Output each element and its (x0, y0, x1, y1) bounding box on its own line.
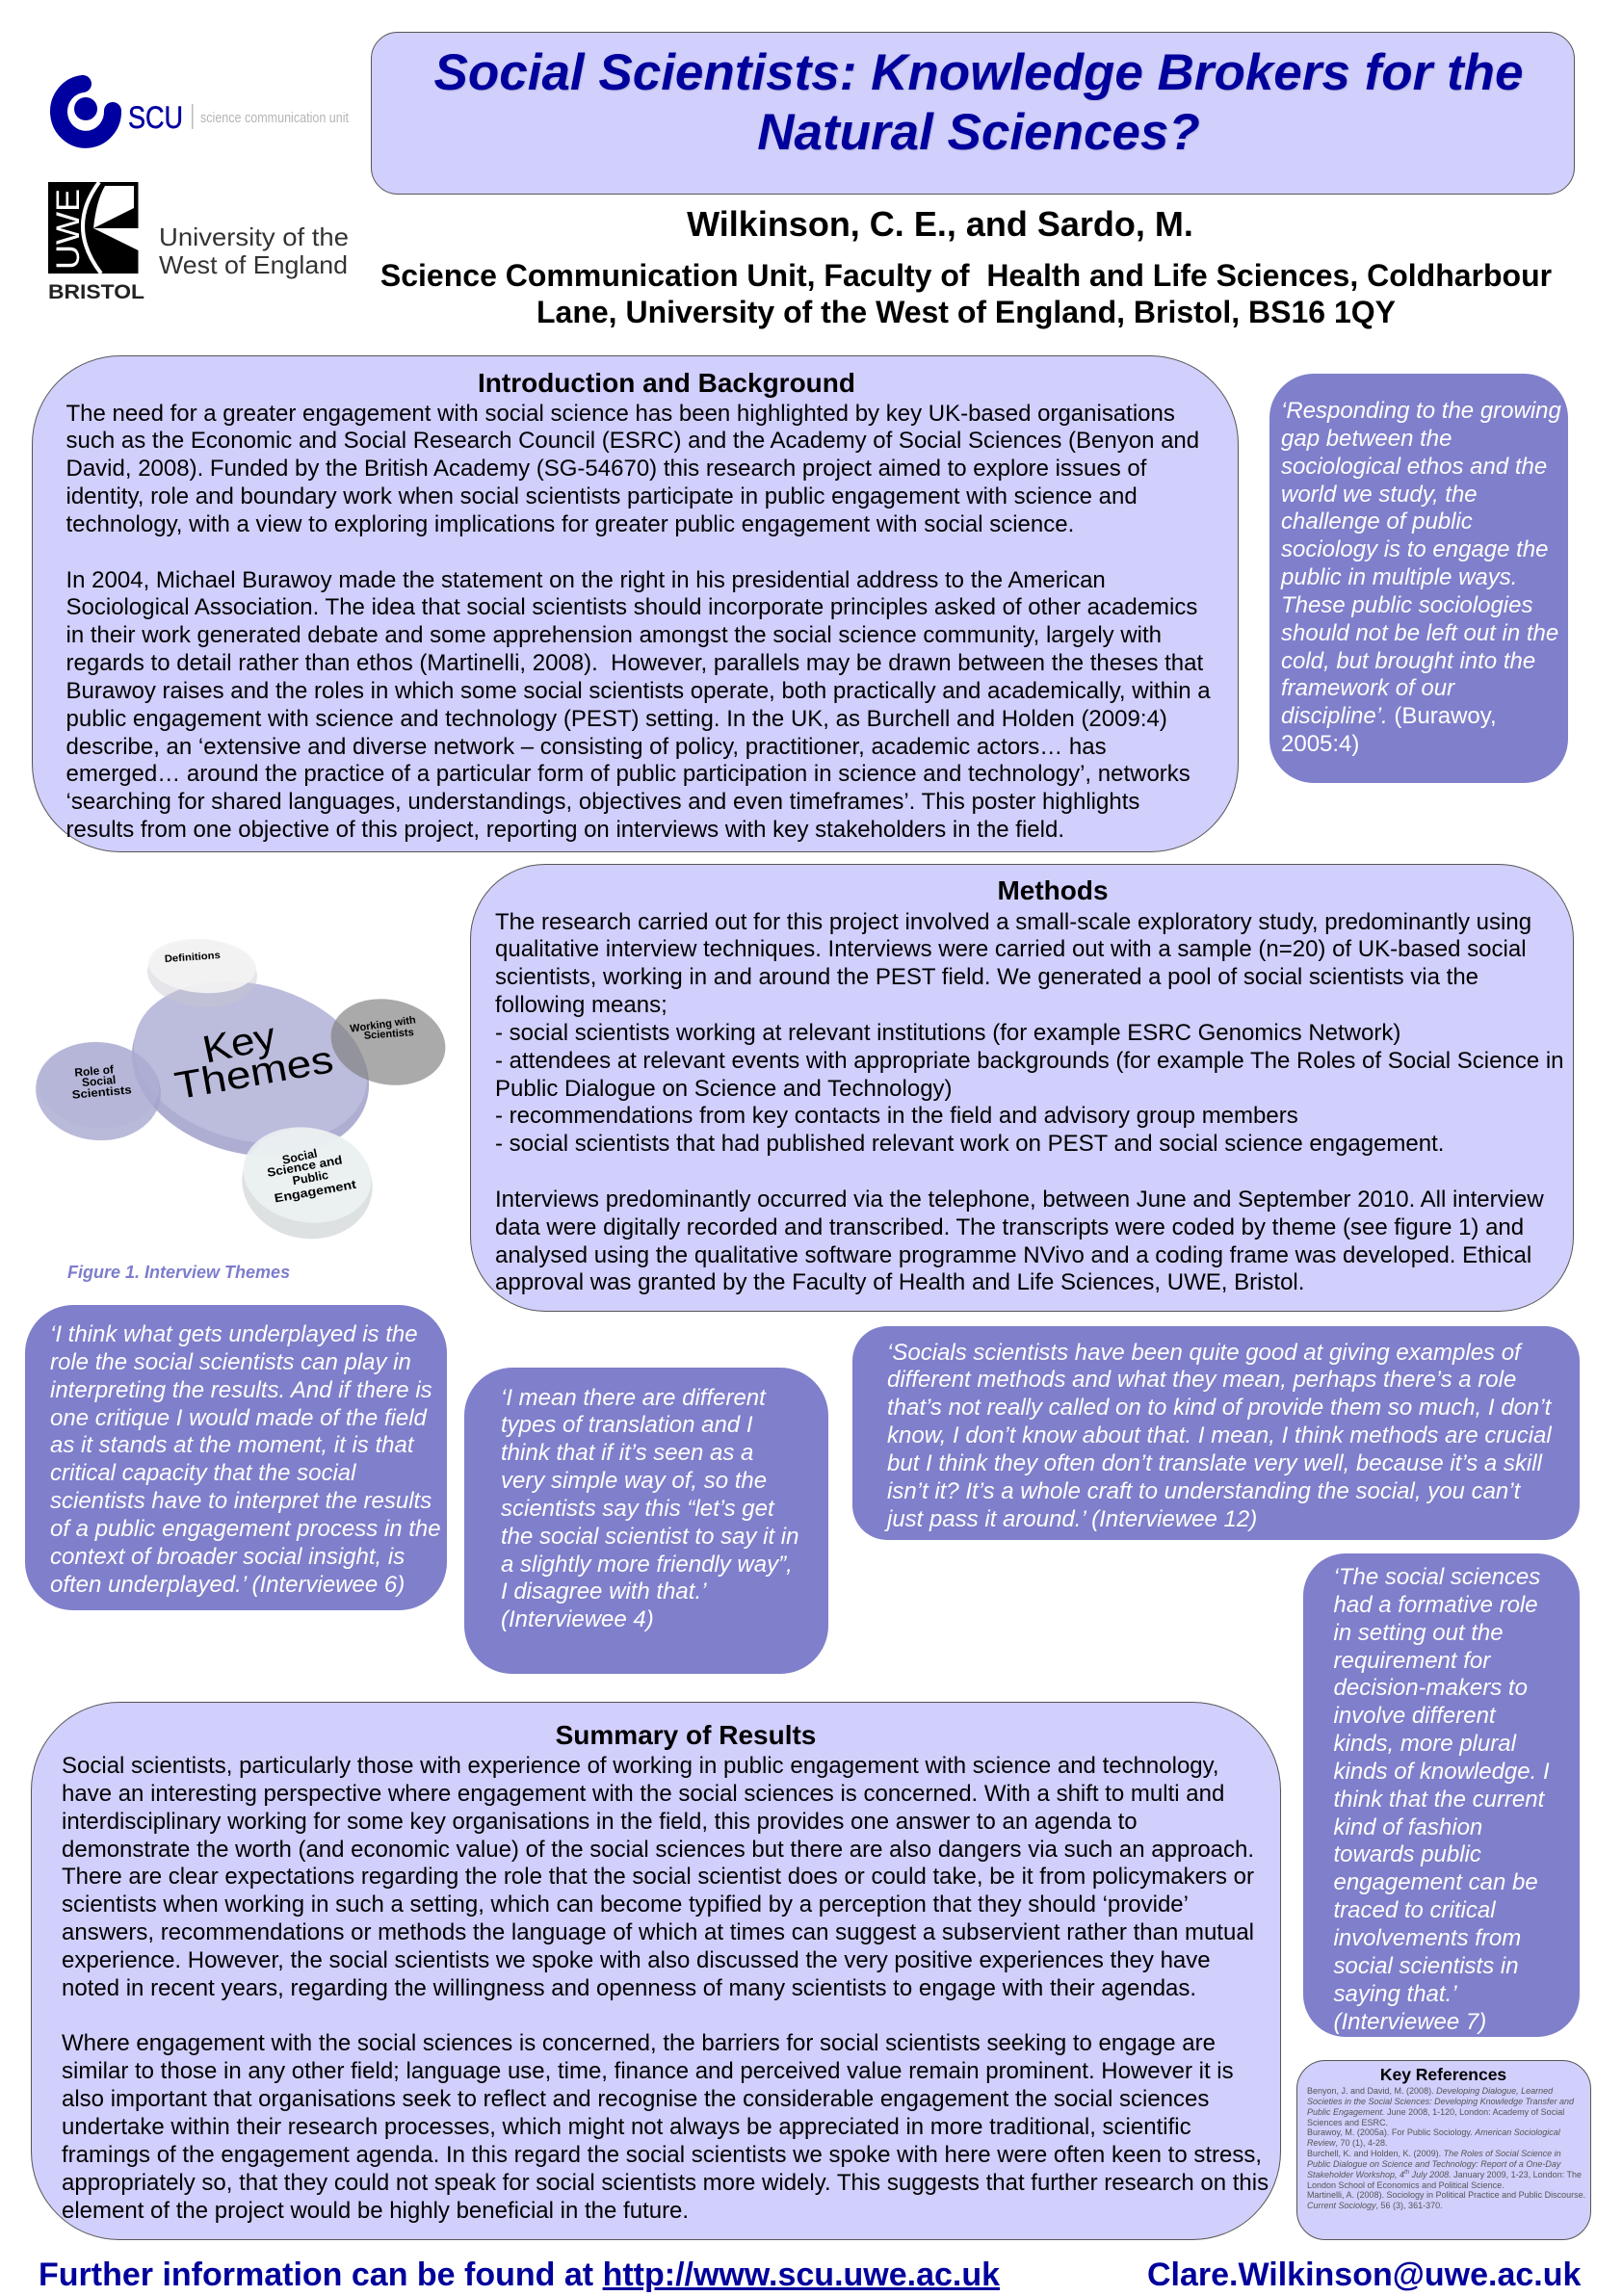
logo: University of the West of England: UWE (50, 189, 87, 270)
chart: key themes diagram (36, 939, 445, 1239)
callout: interviewee 7 quote: kind of fashion (1333, 1814, 1482, 1840)
theme: social science and public engagement: Social (281, 1146, 319, 1167)
callout: interviewee 7 quote: social scientists in (1333, 1953, 1519, 1979)
text: introduction body: David, 2008). Funded by the British Academy (SG-54670) this research project aimed to explore issues of (65, 456, 1146, 482)
title banner: Social Scientists: Knowledge Brokers for the (434, 44, 1523, 101)
callout: interviewee 4 quote: types of translation and I (501, 1412, 753, 1438)
callout: interviewee 7 quote: kinds of knowledge. I (1333, 1759, 1550, 1785)
callout: Burawoy quote: world we study, the (1281, 482, 1478, 508)
text: summary body: have an interesting perspective where engagement with the social sciences is concerned. With a shift to multi and (62, 1781, 1224, 1807)
text: methods body: analysed using the qualitative software programme NVivo and a coding frame was developed. Ethical (495, 1242, 1531, 1268)
callout: Burawoy quote: challenge of public (1281, 509, 1473, 535)
callout: interviewee 4 quote: a slightly more friendly way”, (501, 1552, 793, 1578)
callout: Burawoy quote: gap between the (1281, 426, 1452, 452)
text: summary body (62, 1753, 1269, 2223)
text: introduction body: The need for a greater engagement with social science has been highlighted by key UK-based organisations (65, 401, 1175, 426)
logo: science communication unit: SCU (128, 100, 183, 135)
text: summary body: Where engagement with the social sciences is concerned, the barriers for social scientists seeking to engage are (62, 2030, 1216, 2056)
callout: interviewee 4 quote: scientists say this “let’s get (501, 1496, 774, 1522)
text: reference list: Martinelli, A. (2008). Sociology in Political Practice and Public Discourse. (1307, 2190, 1585, 2200)
logo: University of the West of England: BRISTOL (48, 281, 144, 303)
text: reference list: Current Sociology, 56 (3), 361-370. (1307, 2201, 1443, 2210)
panel: key references (1296, 2060, 1591, 2240)
text: reference list (1307, 2086, 1585, 2210)
text: introduction body: ‘searching for shared languages, understandings, objectives and even timeframes’. This poster highlights (65, 789, 1139, 815)
callout: Burawoy quote: ‘Responding to the growing (1281, 398, 1561, 424)
theme: key themes: Key (199, 1015, 279, 1072)
text: methods body: following means; (495, 992, 667, 1018)
text: methods body: Public Dialogue on Science and Technology) (495, 1076, 953, 1102)
text: introduction body: public engagement with science and technology (PEST) setting. In the UK, as Burchell and Holden (2009:4) (65, 706, 1167, 732)
text: methods body: - attendees at relevant events with appropriate backgrounds (for example The Roles of Social Science in (495, 1048, 1564, 1074)
callout: interviewee 6 quote: critical capacity that the social (50, 1460, 355, 1486)
callout: Burawoy quote: public in multiple ways. (1281, 564, 1517, 590)
callout: interviewee 6 quote: one critique I would made of the field (50, 1405, 427, 1431)
caption: figure 1: Figure 1. Interview Themes (67, 1263, 290, 1282)
theme: working with scientists (323, 988, 454, 1096)
text: methods body: data were digitally recorded and transcribed. The transcripts were coded by theme (see figure 1) and (495, 1214, 1524, 1240)
text: methods body: qualitative interview techniques. Interviews were carried out with a sample (n=20) of UK-based social (495, 936, 1527, 962)
callout: Burawoy quote: discipline’. (Burawoy, (1281, 703, 1497, 729)
theme: role of social scientists: Role of (74, 1062, 116, 1080)
text: reference list: Societies in the Social Sciences: Developing Knowledge Transfer and (1307, 2097, 1574, 2106)
theme: social science and public engagement: Engagement (274, 1178, 358, 1205)
affiliation: Science Communication Unit, Faculty of Health and Life Sciences, Coldharbour (380, 258, 1552, 293)
panel: summary of results (31, 1702, 1281, 2240)
theme: role of social scientists (32, 1037, 165, 1145)
title banner (371, 32, 1575, 195)
text: methods body: - social scientists that had published relevant work on PEST and social science engagement. (495, 1131, 1444, 1157)
heading: methods: Methods (997, 875, 1109, 905)
callout: interviewee 7 quote: ‘The social sciences (1333, 1564, 1540, 1590)
callout: interviewee 7 quote: decision-makers to (1333, 1675, 1528, 1701)
callout: interviewee 6 quote: role the social scientists can play in (50, 1349, 411, 1375)
callout: interviewee 7 quote: saying that.’ (1333, 1981, 1457, 2007)
callout: interviewee 12 quote: different methods and what they mean, perhaps there’s a role (887, 1367, 1516, 1393)
text: summary body: also important that organisations seek to reflect and recognise the considerable engagement the social sciences (62, 2086, 1209, 2112)
callout: interviewee 6 quote: scientists have to interpret the results (50, 1488, 432, 1514)
callout: Burawoy quote: 2005:4) (1281, 731, 1359, 757)
affiliation (380, 258, 1552, 329)
logo: science communication unit (50, 75, 350, 148)
callout: interviewee 12 quote: but I think they often don’t translate very well, because it’s a skill (887, 1450, 1542, 1476)
callout: interviewee 6 quote: context of broader social insight, is (50, 1544, 405, 1570)
text: introduction body: regards to detail rather than ethos (Martinelli, 2008). However, parallels may be drawn between the theses that (65, 650, 1203, 676)
text: summary body: noted in recent years, regarding the willingness and openness of many scientists to engage with their agendas. (62, 1975, 1196, 2001)
theme: role of social scientists: Scientists (71, 1083, 132, 1102)
callout: interviewee 7 quote: engagement can be (1333, 1869, 1538, 1895)
text: reference list: Review, 70 (1), 4-28. (1307, 2138, 1388, 2148)
callout: interviewee 7 quote: kinds, more plural (1333, 1731, 1516, 1757)
callout: Burawoy quote: cold, but brought into the (1281, 648, 1535, 674)
text: reference list: Benyon, J. and David, M. (2008). Developing Dialogue, Learned (1307, 2086, 1553, 2096)
theme: social science and public engagement: Science and (266, 1153, 343, 1180)
footer: contact email: Clare.Wilkinson@uwe.ac.uk (1147, 2256, 1581, 2292)
text: summary body: scientists when working in such a setting, which can become typified by a perception that they should ‘provide’ (62, 1892, 1189, 1918)
text: reference list: London School of Economics and Political Science. (1307, 2180, 1504, 2190)
callout: interviewee 6 quote: interpreting the results. And if there is (50, 1377, 432, 1403)
callout: interviewee 7 quote: had a formative role (1333, 1592, 1538, 1618)
callout: interviewee 4 quote (464, 1368, 828, 1674)
title banner: Natural Sciences? (757, 104, 1200, 161)
callout: interviewee 12 quote: know, I don’t know about that. I mean, I think methods are crucial (887, 1422, 1552, 1448)
text: reference list: Public Engagement. June 2008, 1-120, London: Academy of Social (1307, 2107, 1564, 2117)
text: introduction body: results from one objective of this project, reporting on interviews with key stakeholders in the field. (65, 817, 1064, 843)
callout: interviewee 6 quote: of a public engagement process in the (50, 1516, 441, 1542)
callout: interviewee 7 quote (1303, 1553, 1580, 2037)
callout: interviewee 4 quote: I disagree with that.’ (501, 1578, 706, 1605)
theme: working with scientists: Working with (350, 1014, 417, 1035)
callout: interviewee 4 quote: the social scientist to say it in (501, 1524, 798, 1550)
panel: methods (470, 864, 1574, 1312)
text: introduction body: such as the Economic and Social Research Council (ESRC) and the Academy of Social Sciences (Benyon and (65, 428, 1199, 454)
text: reference list: Sciences and ESRC. (1307, 2118, 1388, 2127)
callout: interviewee 7 quote: involvements from (1333, 1925, 1521, 1951)
text: reference list: Public Dialogue on Science and Technology: Report of a One-Day (1307, 2159, 1560, 2169)
callout: interviewee 7 quote: (Interviewee 7) (1333, 2009, 1486, 2034)
theme: working with scientists: Scientists (363, 1027, 414, 1042)
callout: interviewee 7 quote: traced to critical (1333, 1897, 1496, 1923)
callout: interviewee 6 quote: as it stands at the moment, it is that (50, 1432, 414, 1458)
theme: definitions (145, 935, 259, 1011)
text: summary body: undertake within their research processes, which might not always be appreciated in more traditional, scientific (62, 2114, 1191, 2140)
text: summary body: There are clear expectations regarding the role that the social scientist does or could take, be it from policymakers or (62, 1864, 1254, 1890)
text: methods body: The research carried out for this project involved a small-scale exploratory study, predominantly using (495, 909, 1531, 934)
callout: interviewee 12 quote: isn’t it? It’s a whole craft to understanding the social, you can’t (887, 1478, 1520, 1504)
theme: key themes: Themes (171, 1038, 336, 1108)
text: summary body: Social scientists, particularly those with experience of working in public engagement with science and technology, (62, 1753, 1219, 1779)
text: methods body: Interviews predominantly occurred via the telephone, between June and September 2010. All interview (495, 1187, 1544, 1213)
text: introduction body: Burawoy raises and the roles in which some social scientists operate, both practically and academically, within a (65, 678, 1211, 704)
text: reference list: Burawoy, M. (2005a). For Public Sociology. American Sociological (1307, 2127, 1560, 2137)
text: reference list: Stakeholder Workshop, 4th July 2008. January 2009, 1-23, London: The (1307, 2170, 1582, 2179)
callout: interviewee 6 quote: ‘I think what gets underplayed is the (50, 1321, 418, 1347)
callout: Burawoy quote: sociological ethos and the (1281, 454, 1547, 480)
text: introduction body: identity, role and boundary work when social scientists participate in public engagement with science and (65, 483, 1138, 509)
callout: interviewee 4 quote: think that if it’s seen as a (501, 1440, 753, 1466)
text: introduction body: technology, with a view to exploring implications for greater public engagement with social science. (65, 511, 1074, 537)
logo: University of the West of England: West of England (159, 250, 348, 279)
text: methods body: approval was granted by the Faculty of Health and Life Sciences, UWE, Bristol. (495, 1269, 1304, 1295)
text: methods body: - recommendations from key contacts in the field and advisory group members (495, 1103, 1298, 1129)
text: introduction body: describe, an ‘extensive and diverse network – consisting of policy, practitioner, academic actors… has (65, 734, 1107, 760)
text: summary body: demonstrate the worth (and economic value) of the social sciences but there are also dangers via such an approach. (62, 1837, 1254, 1863)
heading: key references: Key References (1380, 2065, 1506, 2084)
text: methods body (495, 909, 1564, 1295)
callout: Burawoy quote: sociology is to engage the (1281, 536, 1549, 562)
callout: Burawoy quote (1269, 374, 1568, 783)
text: summary body: framings of the engagement agenda. In this regard the social scientists we spoke with here were often keen to stress, (62, 2142, 1262, 2168)
callout: interviewee 7 quote: involve different (1333, 1703, 1496, 1729)
theme: definitions: Definitions (164, 950, 221, 965)
callout: interviewee 7 quote: towards public (1333, 1841, 1481, 1867)
text: summary body: interdisciplinary working for some key organisations in the field, this provides one answer to an agenda to (62, 1809, 1138, 1835)
theme: social science and public engagement: Public (292, 1168, 329, 1187)
callout: interviewee 6 quote (25, 1305, 447, 1610)
callout: Burawoy quote: framework of our (1281, 675, 1454, 701)
callout: interviewee 12 quote: that’s not really called on to kind of provide them so much, I don’t (887, 1395, 1551, 1421)
text: introduction body: in their work generated debate and some apprehension amongst the social science community, largely with (65, 622, 1162, 648)
panel: introduction and background (32, 355, 1239, 852)
logo: University of the West of England: University of the (159, 222, 349, 251)
text: methods body: - social scientists working at relevant institutions (for example ESRC Genomics Network) (495, 1020, 1400, 1046)
text: reference list: Burchell, K. and Holden, K. (2009). The Roles of Social Science in (1307, 2149, 1561, 2158)
text: summary body: appropriately so, that they could not speak for social scientists more widely. This suggests that further research on this (62, 2170, 1269, 2196)
heading: introduction: Introduction and Background (478, 368, 855, 398)
heading: summary of results: Summary of Results (556, 1720, 816, 1749)
affiliation: Lane, University of the West of England, Bristol, BS16 1QY (536, 295, 1396, 329)
callout: interviewee 6 quote: often underplayed.’ (Interviewee 6) (50, 1572, 405, 1598)
callout: interviewee 12 quote (852, 1326, 1580, 1540)
text: summary body: experience. However, the social scientists we spoke with also discussed the very positive experiences they have (62, 1947, 1211, 1973)
callout: interviewee 7 quote: think that the current (1333, 1787, 1544, 1813)
callout: interviewee 12 quote: ‘Socials scientists have been quite good at giving examples of (887, 1339, 1521, 1366)
callout: interviewee 4 quote: ‘I mean there are different (501, 1385, 766, 1410)
callout: interviewee 4 quote: (Interviewee 4) (501, 1606, 654, 1632)
text: introduction body: emerged… around the practice of a particular form of public participation in science and technology’, networks (65, 761, 1190, 787)
callout: interviewee 7 quote: requirement for (1333, 1648, 1490, 1674)
callout: interviewee 4 quote: very simple way of, so the (501, 1468, 767, 1494)
logo: University of the West of England (48, 182, 349, 303)
authors: Wilkinson, C. E., and Sardo, M. (687, 204, 1193, 244)
theme: social science and public engagement (233, 1117, 381, 1249)
footer: further information link: Further information can be found at http://www.scu.uwe.ac.uk (39, 2256, 1000, 2292)
theme: role of social scientists: Social (81, 1073, 117, 1089)
text: introduction body (65, 401, 1211, 843)
text: introduction body: Sociological Association. The idea that social scientists should incorporate principles asked of other academics (65, 594, 1197, 620)
callout: interviewee 7 quote: in setting out the (1333, 1620, 1504, 1646)
theme: key themes (114, 958, 387, 1181)
callout: Burawoy quote: should not be left out in the (1281, 620, 1558, 646)
text: summary body: element of the project would be highly beneficial in the future. (62, 2198, 689, 2223)
callout: interviewee 12 quote: just pass it around.’ (Interviewee 12) (887, 1506, 1257, 1532)
text: introduction body: In 2004, Michael Burawoy made the statement on the right in his presidential address to the American (65, 567, 1106, 593)
text: summary body: answers, recommendations or methods the language of which at times can suggest a subservient rather than mutual (62, 1919, 1254, 1945)
text: summary body: similar to those in any other field; language use, time, finance and perceived value remain prominent. However it is (62, 2058, 1234, 2084)
callout: Burawoy quote: These public sociologies (1281, 592, 1532, 618)
text: methods body: scientists, working in and around the PEST field. We generated a pool of social scientists via the (495, 964, 1478, 990)
